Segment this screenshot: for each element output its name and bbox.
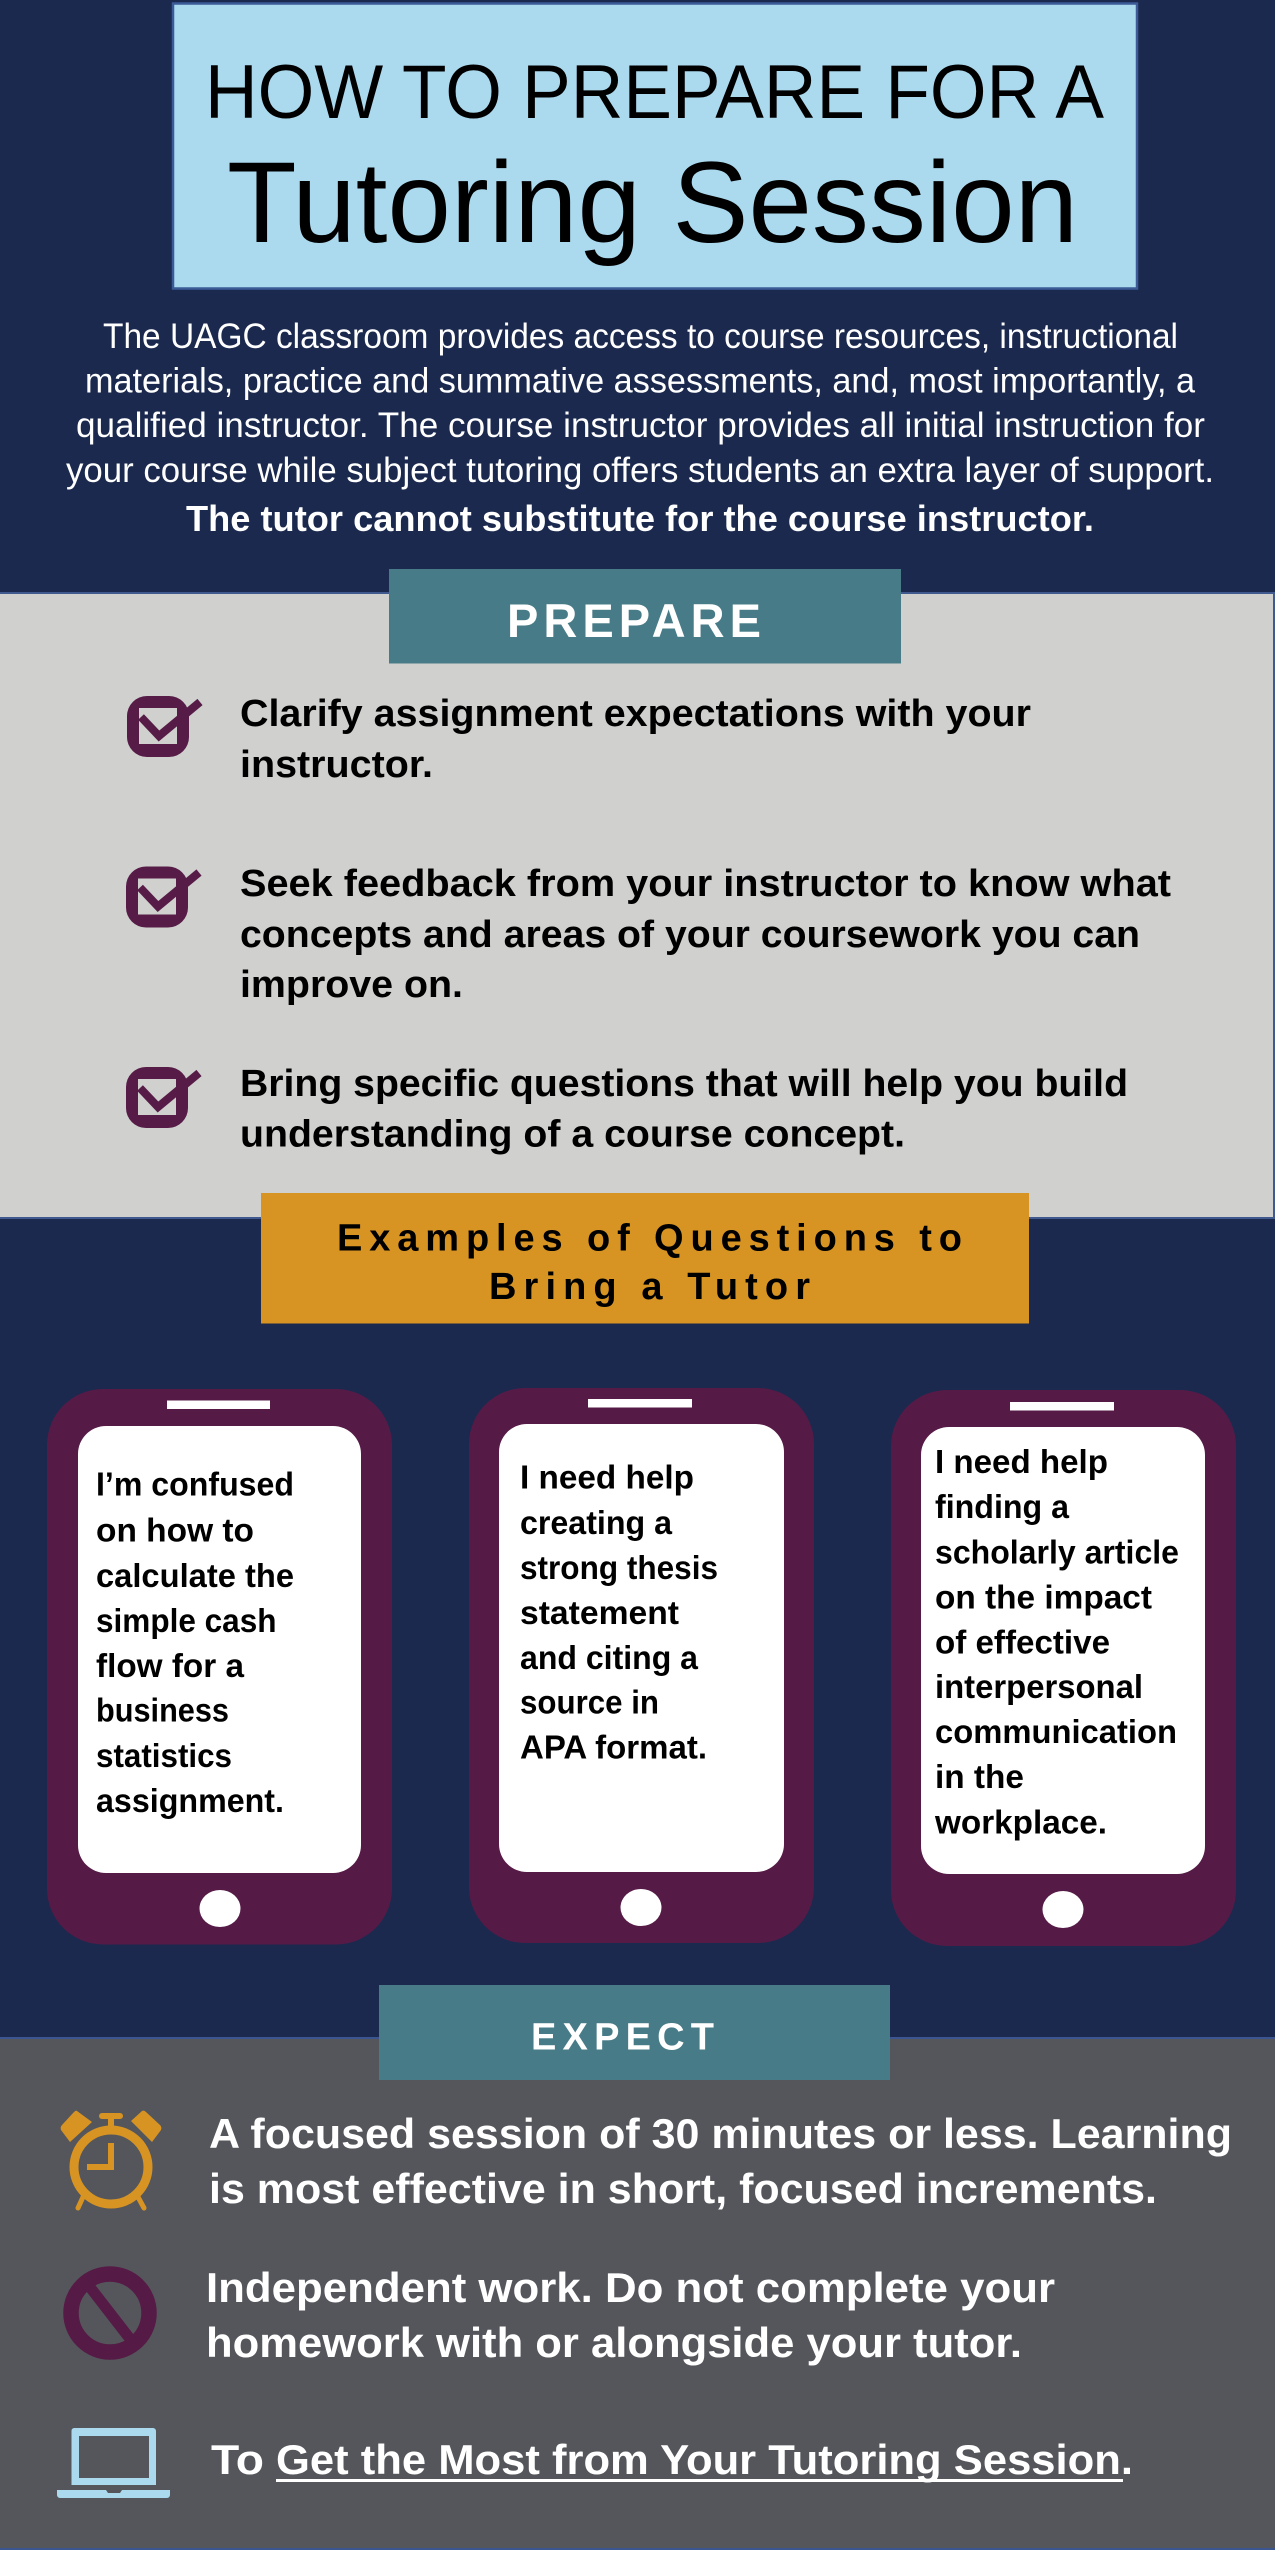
- icon: laptop: [57, 2428, 170, 2498]
- question text 3: [934, 1443, 1179, 1840]
- intro text block: materials, practice and summative assessments, and, most importantly, a: [85, 362, 1196, 400]
- expect item 2: Independent work. Do not complete your: [206, 2264, 1055, 2311]
- heading: expect: [379, 1985, 890, 2080]
- icon: prohibited sign: [71, 2274, 149, 2352]
- phone 2: [469, 1388, 814, 1943]
- question text 3: finding a: [935, 1488, 1070, 1525]
- question text 3: of effective: [935, 1624, 1110, 1660]
- intro text block: The UAGC classroom provides access to course resources, instructional: [103, 317, 1178, 356]
- icon: checkbox 2: [126, 866, 199, 928]
- checklist item 3: Bring specific questions that will help you build: [240, 1063, 1128, 1105]
- checklist item 2: concepts and areas of your coursework you can: [240, 914, 1140, 956]
- question text 3: I need help: [935, 1443, 1108, 1480]
- question text 1: statistics: [96, 1737, 232, 1774]
- checklist item 1: Clarify assignment expectations with your: [240, 693, 1031, 735]
- checklist item 2: [240, 863, 1171, 1006]
- question text 3: in the: [935, 1758, 1024, 1795]
- question text 2: creating a: [520, 1504, 673, 1541]
- panel: title: HOW TO PREPARE FOR A: [205, 50, 1104, 135]
- checklist item 1: instructor.: [240, 744, 433, 786]
- question text 2: I need help: [520, 1458, 694, 1496]
- checklist item 3: understanding of a course concept.: [240, 1114, 905, 1156]
- expect item 1: A focused session of 30 minutes or less. Learning: [209, 2110, 1232, 2157]
- expect item 1: [209, 2110, 1232, 2212]
- link line: To: [211, 2436, 264, 2483]
- checklist item 2: improve on.: [240, 964, 463, 1006]
- question text 3: on the impact: [935, 1578, 1152, 1616]
- heading: prepare: PREPARE: [507, 594, 761, 647]
- heading: prepare: [389, 569, 901, 664]
- question text 1: assignment.: [96, 1782, 284, 1819]
- question text 1: I’m confused: [96, 1466, 294, 1502]
- question text 2: [520, 1458, 718, 1766]
- panel: expect: [0, 1985, 1275, 2549]
- question text 1: business: [96, 1692, 229, 1728]
- intro text block: qualified instructor. The course instructor provides all initial instruction for: [76, 406, 1205, 445]
- intro text block: your course while subject tutoring offers students an extra layer of support.: [66, 451, 1214, 490]
- icon: checkbox 3: [126, 1067, 199, 1128]
- checklist item 3: [240, 1063, 1128, 1156]
- question text 3: scholarly article: [935, 1534, 1179, 1570]
- question text 3: interpersonal: [935, 1668, 1143, 1705]
- link line: Get the Most from Your Tutoring Session.: [276, 2436, 1133, 2483]
- expect item 2: homework with or alongside your tutor.: [206, 2319, 1022, 2366]
- phone 1: [47, 1389, 392, 1944]
- checklist item 1: [240, 693, 1031, 786]
- panel: title: [173, 4, 1137, 288]
- panel: prepare: [0, 569, 1274, 1218]
- question text 3: communication: [935, 1713, 1177, 1750]
- heading: expect: EXPECT: [531, 2016, 714, 2058]
- icon: alarm clock: [61, 2111, 161, 2208]
- question text 2: source in: [520, 1684, 659, 1720]
- intro text block: The tutor cannot substitute for the course instructor.: [186, 498, 1094, 539]
- question text 1: simple cash: [96, 1602, 276, 1639]
- question text 2: and citing a: [520, 1639, 699, 1676]
- heading: examples of questions: Examples of Questions to: [337, 1218, 962, 1260]
- question text 2: APA format.: [520, 1728, 707, 1766]
- phone 3: [891, 1390, 1236, 1946]
- question text 2: strong thesis: [520, 1549, 718, 1586]
- expect item 2: [206, 2264, 1055, 2366]
- icon: checkbox 1: [127, 696, 200, 757]
- question text 1: flow for a: [96, 1647, 245, 1684]
- question text 1: [96, 1466, 294, 1819]
- checklist item 2: Seek feedback from your instructor to know what: [240, 863, 1171, 905]
- question text 3: workplace.: [934, 1804, 1107, 1840]
- heading: examples of questions: [261, 1193, 1029, 1324]
- panel: title: Tutoring Session: [227, 139, 1078, 267]
- question text 1: on how to: [96, 1512, 254, 1548]
- expect item 1: is most effective in short, focused increments.: [209, 2165, 1157, 2212]
- heading: examples of questions: Bring a Tutor: [489, 1266, 810, 1308]
- question text 2: statement: [520, 1594, 679, 1631]
- question text 1: calculate the: [96, 1557, 294, 1594]
- intro text block: [66, 317, 1214, 539]
